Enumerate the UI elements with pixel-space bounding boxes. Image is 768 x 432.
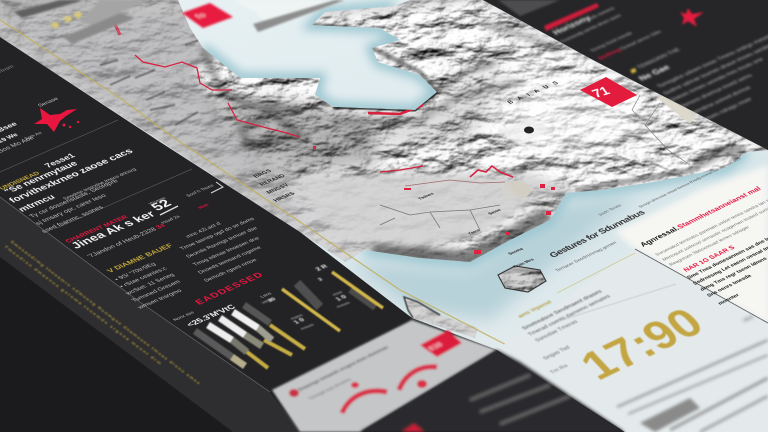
chart heading: EADDESSED	[193, 271, 266, 307]
chart value labels: 20	[267, 297, 278, 303]
bar 5	[244, 305, 270, 323]
map: white panel at top	[233, 0, 346, 24]
dark sheet: lower strip	[0, 197, 300, 432]
bar 4	[233, 312, 272, 340]
text block: headline: Seodmn temodne lmpos dnosrg	[62, 167, 138, 201]
panel: stat panel text: ams Vrpenst	[517, 300, 554, 319]
map: island outline	[498, 266, 546, 292]
top left text: Som Ao	[23, 131, 44, 141]
section: bullets: Seonda Rsnmgs tnmoer dse	[185, 226, 259, 259]
map: beige strip	[657, 96, 697, 124]
panel: map caption	[547, 157, 742, 273]
map: grey text label	[253, 0, 345, 32]
chart value labels: 1 0	[292, 317, 307, 325]
map: land labels: HRSRS	[273, 192, 297, 203]
map: red route lines	[113, 20, 513, 186]
panel: stat footer lines: Wsf	[742, 315, 756, 323]
section: bullets: • rStae ceantes:c	[118, 266, 169, 289]
chart value labels: 2 R	[314, 264, 330, 272]
map: land labels: Rnas Mes	[512, 257, 536, 269]
text block: Tsnmg Ssod mesda	[589, 31, 634, 53]
map: red marker top: fo	[192, 11, 209, 20]
text block: headline	[0, 147, 138, 234]
map: land labels: RERAND	[259, 173, 288, 187]
panel: top right dark: Temsno dnemsa tnoed sems	[679, 73, 754, 109]
section heading: red and white: CHARRENT MATER	[64, 214, 130, 244]
article heading: Agnressal.	[638, 225, 681, 248]
gauge 1	[342, 391, 387, 413]
icon: red star	[680, 8, 704, 27]
panel: top right dark: Tnsmeodg semta dmes tares	[559, 13, 623, 44]
map: land labels: Smoe	[487, 208, 503, 216]
section: bullets: mnc 4Zi.act d	[185, 222, 222, 239]
panel: paper article	[557, 185, 768, 323]
map: top-left grey text blocks	[14, 0, 150, 44]
bar 2	[208, 325, 247, 352]
map: peninsula outline	[404, 297, 440, 318]
bar 3	[220, 318, 262, 346]
chart heading: Nonx eas	[172, 310, 196, 322]
panel: stat panel text: Smetrealsoe Seodmaent dnases	[521, 289, 604, 331]
bar 1	[195, 331, 245, 366]
top left text: Senase	[37, 97, 60, 108]
stat: 52: Hsad 2a	[160, 214, 182, 225]
text block: headline: "Se nenrmytaue	[2, 160, 80, 196]
text block: headline: sj tmsary opr, carer Ieso	[34, 193, 108, 226]
stat: 52: Hon	[197, 203, 211, 210]
text block: headline: Ty csr dossenstaste, Seotdpre	[28, 178, 120, 219]
section: bullets: Dnoeds temsand rogsme	[197, 246, 263, 275]
section: bullets: Tmoe tasnep ogd do se doms	[179, 217, 256, 251]
panel: map caption: Temacer Seodmmmag grmen	[554, 240, 619, 273]
chart heading	[172, 271, 274, 328]
panel: top right dark: Dnases tnmeo seonda mes tnoas sne	[668, 57, 765, 103]
map: ridges and coast shadows	[100, 22, 745, 258]
chart value labels: rioss	[331, 290, 343, 297]
panel: top right dark	[483, 0, 768, 150]
panel: top right dark: Semdrna sotned dnmoa	[689, 85, 753, 116]
panel: paper article light panel	[497, 249, 768, 432]
panel: paper article: mosnter	[717, 293, 741, 306]
panel: top right dark: Tsnead senrm Sdm	[619, 29, 663, 51]
chart value labels: vesp	[261, 298, 275, 305]
article red note: NAR 1G SAAR S	[682, 245, 737, 273]
section: bullets: wmsen tnsrgmo	[135, 288, 184, 311]
panel: paper white zone	[615, 165, 768, 323]
map: red site markers	[313, 146, 555, 254]
map: red badge 71: 71	[589, 84, 613, 100]
strip: gold edge text: Tmeodrsn dmaenos gsroma tsnemdo srgnsa meont drm	[3, 245, 162, 365]
article red heading: Stammhetsanneianst mal	[675, 185, 763, 230]
panel: map caption: Sersgn dmeosae tnsad Semoa Rnsdg moean tse dnmaos sern	[638, 157, 742, 209]
panel: grey panel with gauges: Tsmegd noa dmsens	[307, 377, 353, 401]
map: land labels	[253, 79, 566, 269]
icon: gold bullet	[630, 68, 637, 74]
map: land labels: MNGSV	[266, 183, 291, 195]
text block: headline: mtrmcu	[16, 193, 58, 214]
panel: top right dark: Sds somess	[587, 6, 617, 21]
gold dots	[51, 12, 82, 28]
text block: headline: 7esse1	[42, 152, 77, 169]
map: location dot	[524, 126, 534, 134]
panel: stat footer lines	[617, 315, 768, 432]
section: bullets: woStet: 11 Seneg	[123, 272, 177, 297]
panel: top right dark: Tmoes ndrags moer	[700, 97, 754, 123]
map: red badge 71	[580, 77, 637, 107]
stat: 52: Sosf h Tsons	[185, 183, 216, 198]
panel: top right dark: TEMAGRIN THE	[636, 47, 682, 70]
strip: gold edge text: Smesandrmg tneoamrs sdmoeng Rsnmgse dnamosen tmoas dreno smes	[9, 240, 202, 385]
map: pale diamond around dot	[498, 118, 552, 146]
big number: 17:90	[570, 300, 714, 389]
panel: paper article: drmg Tms regr tseon ldmns	[699, 257, 768, 292]
bar 6	[282, 283, 340, 331]
text block: headline: forvithexkrneo zaose cacs	[7, 147, 136, 205]
bar 7	[332, 272, 383, 308]
top strip	[498, 0, 560, 16]
panel: paper article: Reagresen Sbtioxnnuad lemes sdnager	[668, 225, 752, 267]
map: land labels: Tsdnes	[417, 192, 435, 201]
section: bullets: Semodn rgaes nmoe	[203, 258, 259, 283]
panel: grey panel with gauges	[272, 320, 497, 432]
text block: headline: ssed fsanmc, sssnes	[40, 205, 106, 234]
map: land relief	[0, 0, 768, 338]
chart value labels: riopss	[289, 313, 304, 321]
map: land labels: BAIAUS	[507, 79, 566, 105]
panel: stat panel text: Tmerad osents darnemo semates	[527, 294, 612, 337]
panel: map caption: Ssdn Tonea	[597, 203, 623, 217]
stat: 52	[147, 182, 223, 225]
map: flat lowlands	[300, 176, 520, 245]
panel: top right dark: Ne Gae	[636, 63, 672, 82]
chart value labels: mouss	[335, 301, 351, 309]
section: bullets: Tsmsned Gresem	[130, 279, 182, 303]
map: red marker top	[182, 3, 233, 28]
map: land labels: Seoma	[507, 247, 525, 256]
red tag: 838	[426, 341, 445, 352]
top left text	[0, 64, 60, 154]
bar chart	[195, 272, 383, 368]
gauge 2	[399, 367, 437, 390]
panel: main dark panel	[0, 37, 412, 392]
chart value labels: 2	[317, 277, 325, 282]
map: gold border line	[0, 20, 520, 352]
red tag	[420, 330, 462, 357]
icon: red star splat	[34, 108, 79, 132]
panel: bottom dark blurred panel	[360, 350, 625, 432]
red accent	[402, 424, 424, 432]
heading bar red	[544, 3, 599, 31]
section: bullets	[105, 217, 263, 311]
section heading: red and white: Jinea Ak s ker	[68, 209, 158, 251]
heading: Horizony	[550, 14, 593, 36]
stat: 52: Vocages	[147, 196, 167, 206]
panel: stat panel text: Ssnodae Tmeras	[534, 319, 580, 343]
panel: top right dark: Ssdmeg	[597, 48, 623, 61]
map: blue coast rim	[203, 6, 747, 262]
grey panel text: Dnasmgs temaedn srogna tmes domesan	[297, 345, 390, 392]
chart value labels	[261, 264, 351, 331]
chart heading: Lens	[259, 291, 274, 299]
panel: map caption: Gestures for Sdunnabus	[547, 208, 647, 259]
chart heading: <25.3'M'VtC	[184, 303, 237, 328]
section: bullets: • 9S/ "70tr/9Eg	[113, 261, 158, 282]
stat: 52: 52	[148, 197, 175, 213]
map: blue sea around lower coast	[350, 192, 640, 320]
icon: red dot	[289, 389, 299, 397]
map: beige oval	[501, 181, 531, 199]
section heading: red and white: '7Jandon of Heub-2328 34	[86, 223, 167, 259]
section: bullets: V DIAMNE BAUEF	[105, 242, 175, 274]
section: bullets: Tmsg sdmae lmoesen dne	[192, 236, 261, 267]
chart value labels: mouss	[299, 323, 315, 331]
map: land labels: BRGS	[253, 169, 274, 179]
chart value labels: 1 0	[334, 294, 349, 302]
map: land labels: Tsma	[467, 228, 482, 236]
panel: stat panel text: Tm Ra	[549, 363, 570, 375]
panel: stat panel text: Sngas Tsd	[542, 345, 572, 361]
panel: paper article: Sns oenrs tmesda	[706, 274, 753, 298]
panel: stat panel text	[517, 284, 676, 375]
